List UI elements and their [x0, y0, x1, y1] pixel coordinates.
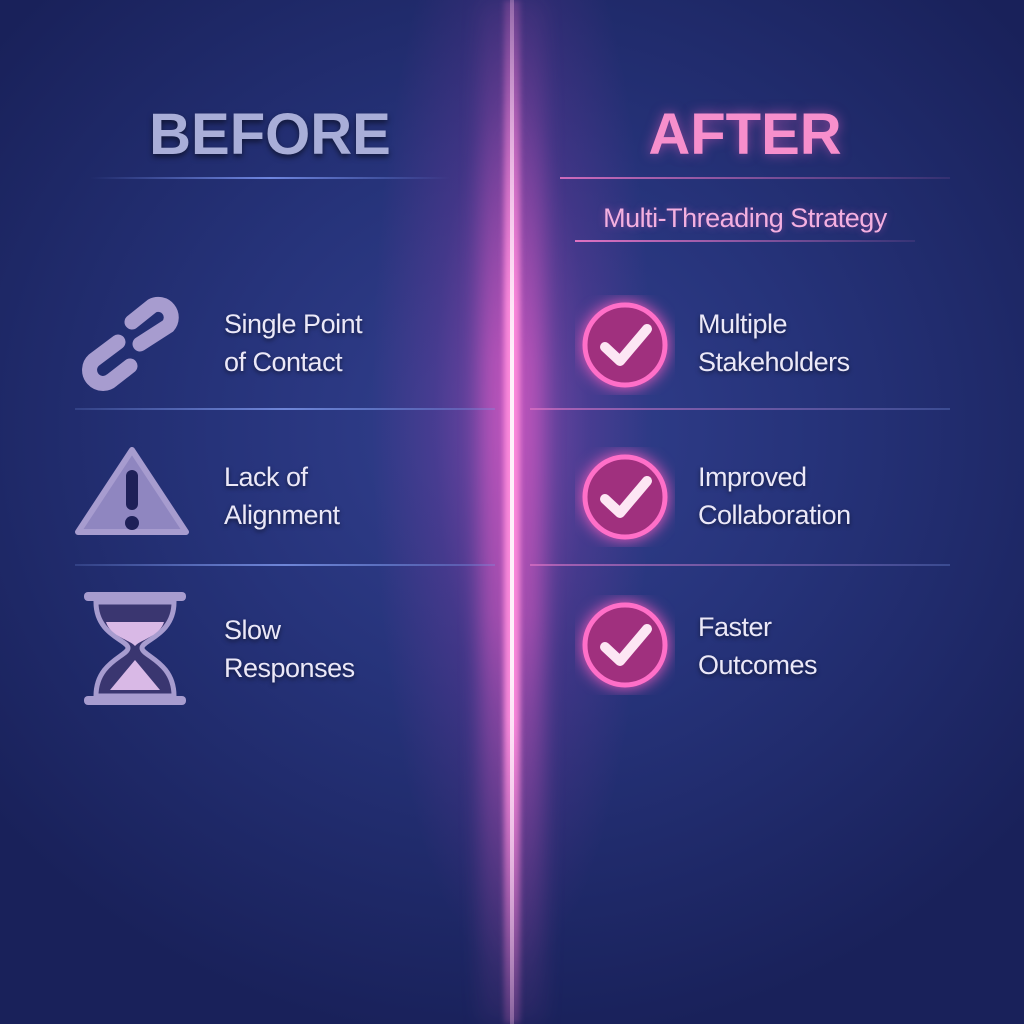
text: multiple stakeholders: Multiple — [698, 309, 787, 339]
text: faster outcomes: Outcomes — [698, 650, 817, 680]
text: slow responses — [224, 615, 356, 686]
icon: broken chain — [82, 296, 179, 391]
icon: warning — [75, 447, 189, 535]
subtitle: Multi-Threading Strategy — [603, 203, 887, 233]
icon: check 3 — [575, 595, 675, 695]
text: single point: of Contact — [224, 347, 342, 377]
text: faster outcomes: Faster — [698, 612, 772, 642]
text: faster outcomes — [697, 612, 818, 680]
text: slow responses: Responses — [224, 653, 355, 683]
heading: AFTER: AFTER — [648, 102, 842, 167]
text: single point — [223, 309, 364, 377]
text: single point: Single Point — [224, 309, 362, 339]
icon: check 1 — [575, 295, 675, 395]
icon: check 2 — [575, 447, 675, 547]
text: slow responses: Slow — [224, 615, 281, 645]
text: lack of alignment: Lack of — [224, 462, 308, 492]
text: lack of alignment: Alignment — [224, 500, 340, 530]
text: lack of alignment — [223, 462, 341, 534]
text: improved collaboration — [697, 462, 852, 530]
heading: BEFORE: BEFORE — [149, 102, 391, 167]
text: improved collaboration: Collaboration — [698, 500, 851, 530]
text: multiple stakeholders: Stakeholders — [698, 347, 850, 377]
text: improved collaboration: Improved — [698, 462, 807, 492]
row separators — [75, 408, 495, 410]
icon: hourglass — [84, 592, 186, 705]
text: multiple stakeholders — [698, 309, 851, 377]
